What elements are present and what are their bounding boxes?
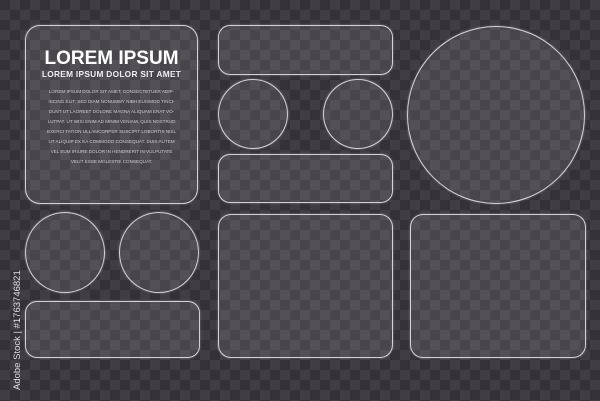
panel: text box bbox=[25, 25, 198, 204]
subtitle: LOREM IPSUM DOLOR SIT AMET bbox=[42, 69, 181, 79]
panel: top pill bbox=[218, 25, 393, 75]
body text: ISCING ELIT, SED DIAM NONUMMY NIBH EUISMOD TINCI- bbox=[48, 99, 175, 104]
title: LOREM IPSUM bbox=[44, 48, 179, 69]
circle: bottom left 2 bbox=[119, 212, 199, 293]
body text: VEL EUM IRIURE DOLOR IN HENDRERIT IN VULPUTATE bbox=[51, 149, 172, 154]
body text: LUTPAT. UT WISI ENIM AD MINIM VENIAM, QUIS NOSTRUD bbox=[48, 119, 175, 124]
body text: UT ALIQUIP EX EA COMMODO CONSEQUAT. DUIS AUTEM bbox=[48, 139, 175, 144]
body text: EXERCI TATION ULLAMCORPER SUSCIPIT LOBORTIS NISL bbox=[47, 129, 176, 134]
body text: LOREM IPSUM DOLOR SIT AMET, CONSECTETUER ADIP- bbox=[49, 89, 174, 94]
panel: right square bbox=[410, 214, 586, 358]
panel: middle square bbox=[218, 214, 393, 358]
body text: DUNT UT LAOREET DOLORE MAGNA ALIQUAM ERAT VO- bbox=[49, 109, 174, 114]
circle: middle right bbox=[323, 79, 393, 149]
circle: middle left bbox=[218, 79, 288, 149]
circle: large bbox=[407, 26, 585, 204]
circle: bottom left 1 bbox=[25, 212, 105, 293]
panel: bottom left pill bbox=[25, 301, 200, 358]
panel: second pill bbox=[218, 154, 393, 203]
body text bbox=[47, 89, 176, 164]
body text: VELIT ESSE MOLESTIE CONSEQUAT. bbox=[71, 159, 152, 164]
watermark id: Adobe Stock | #1763746821 bbox=[12, 270, 23, 390]
